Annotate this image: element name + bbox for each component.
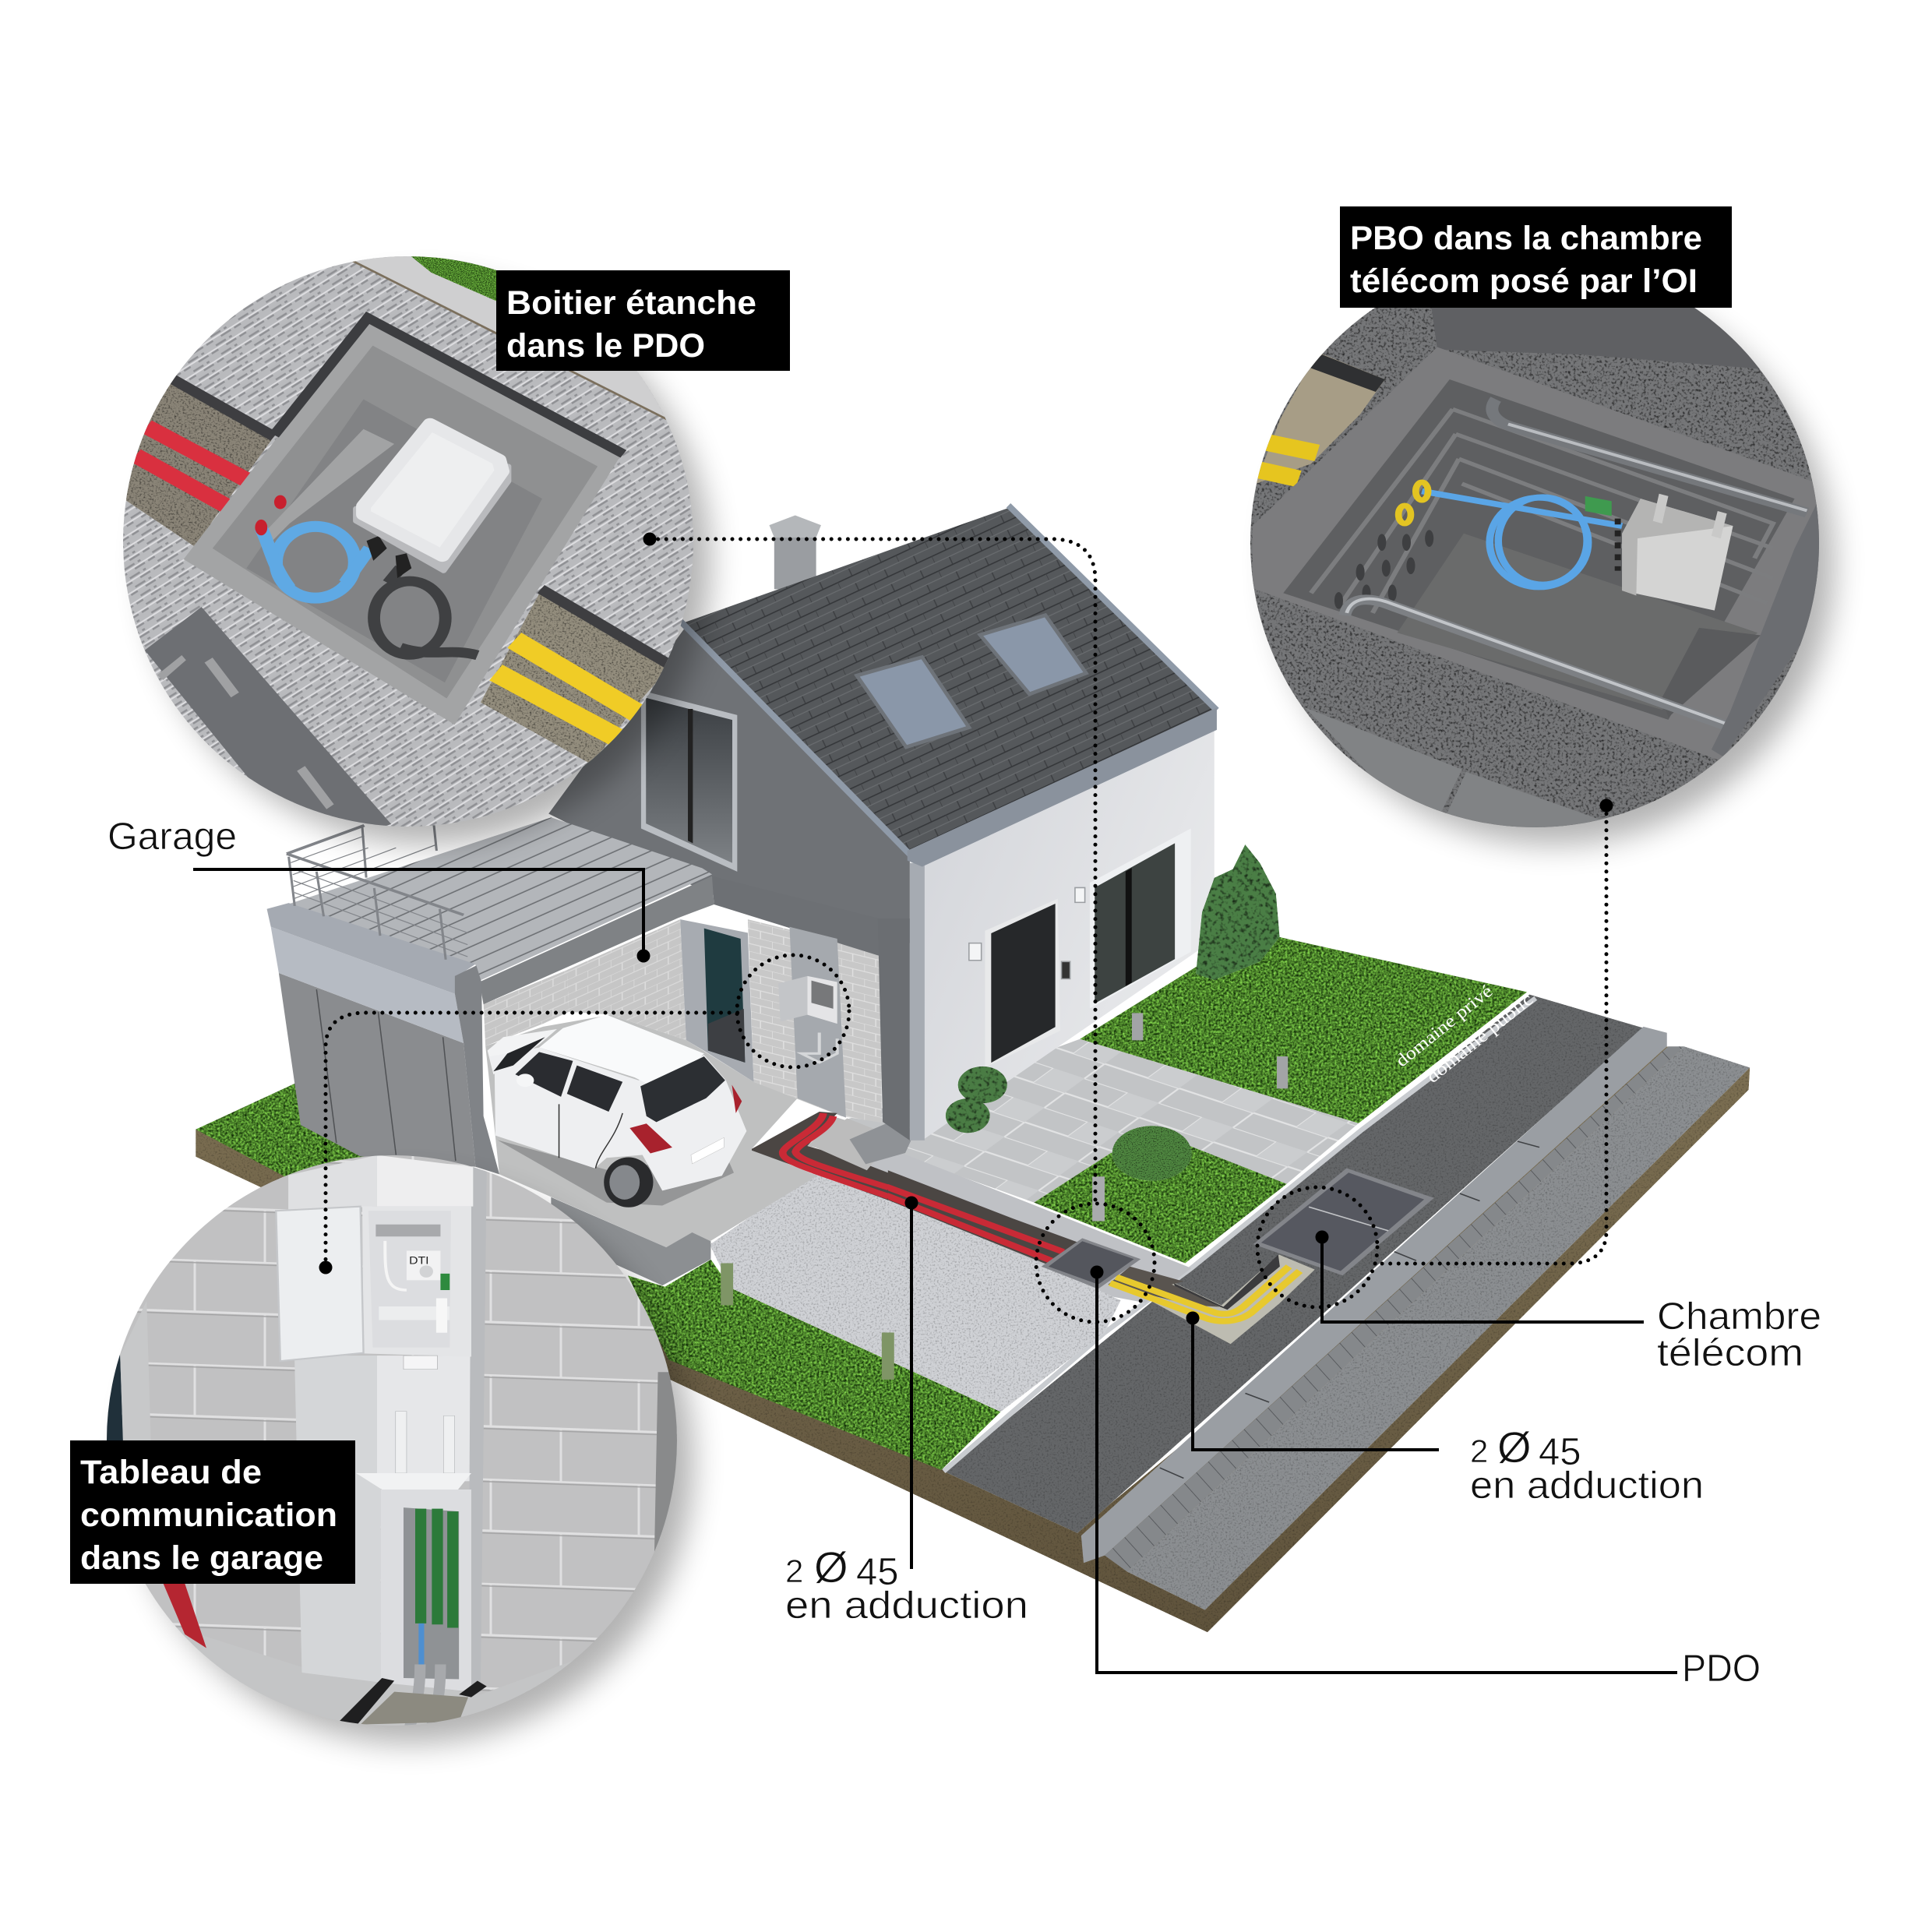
green tag (1585, 496, 1612, 516)
callout: 2 Ø 45 en adduction right: Ø (1497, 1423, 1532, 1472)
plate (691, 1137, 724, 1164)
trench fill (361, 1692, 468, 1725)
lawn front strip (628, 1260, 1000, 1470)
fascia ledge (267, 903, 475, 994)
soil slab edge (196, 1046, 1750, 1632)
label: Tableau de communication: communication (80, 1497, 337, 1534)
doorway (704, 929, 745, 1063)
pit floor (1398, 534, 1757, 710)
DTI module: DTI (409, 1254, 429, 1267)
fibre loops (385, 1241, 407, 1290)
callout: 2 Ø 45 en adduction left (785, 1197, 1028, 1627)
callout: Garage: Garage (108, 816, 237, 858)
light patch under pipes (1148, 1254, 1315, 1344)
carport beam (480, 876, 714, 1004)
dotted connector: PDO circle (650, 539, 1155, 1322)
floor (148, 1618, 616, 1754)
ledge (356, 1473, 471, 1493)
right column (878, 918, 910, 1141)
kerb joints (1160, 1141, 1539, 1479)
pit walls (213, 346, 598, 698)
door frame (680, 919, 754, 1082)
callout: 2 Ø 45 en adduction left: Ø (814, 1542, 848, 1592)
mirror (516, 1074, 534, 1087)
label: PBO dans la chambre: PBO dans la chambre (1350, 220, 1702, 257)
brick wall (101, 1153, 682, 1729)
concrete around step (811, 1118, 894, 1170)
lintel (712, 876, 888, 958)
green conduits (421, 1509, 453, 1628)
concrete edge along road (943, 998, 1535, 1472)
yellow pipe trench (481, 588, 672, 764)
circle shadows (129, 280, 1834, 1743)
column right strip (468, 1167, 487, 1694)
right lid strip (1712, 499, 1828, 757)
rear window (640, 1056, 725, 1122)
pit opening (1283, 379, 1795, 720)
callout: PDO: PDO (1682, 1648, 1761, 1690)
road (943, 995, 1644, 1533)
lower panel (381, 1490, 471, 1692)
sidewalk (1127, 1046, 1750, 1610)
callout: 2 Ø 45 en adduction right (1186, 1312, 1704, 1507)
label: Tableau de communication: Tableau de (80, 1454, 262, 1491)
house body (679, 506, 1536, 1141)
domaine labels (1392, 981, 1536, 1087)
pit frame (1253, 347, 1822, 762)
driveway (710, 1170, 1121, 1412)
stepped ledges (1311, 409, 1773, 613)
conduit opening (404, 1507, 459, 1679)
side windows (515, 1052, 622, 1112)
fascia band (271, 927, 464, 1043)
floor trench (339, 1678, 487, 1725)
callout: 2 Ø 45 en adduction right: en adduction (1470, 1465, 1704, 1507)
mini cabinet (807, 976, 837, 1024)
wall holes (1334, 530, 1433, 609)
cabinet interior (368, 1211, 451, 1348)
car (488, 1015, 746, 1208)
car body (489, 1048, 746, 1190)
column top (288, 1155, 473, 1211)
DTI module (407, 1250, 440, 1280)
cobble strip (1105, 1046, 1684, 1571)
anchor dots for dotted connectors (319, 533, 1613, 1274)
trees (1196, 844, 1280, 980)
label: Tableau de communication (70, 1440, 355, 1584)
gable window (641, 690, 737, 872)
back brick wall (567, 919, 686, 1040)
floor shadow band (1662, 628, 1761, 717)
brick facade (748, 919, 882, 1123)
wall lamps and intercom (969, 887, 1085, 979)
gutter (908, 707, 1217, 866)
red pipes (136, 427, 246, 506)
car hood (488, 1029, 557, 1074)
red pipe trench frame (752, 1112, 888, 1200)
label: Boitier étanche dans le PDO (496, 270, 790, 371)
grey ducts (410, 1665, 440, 1727)
telecom chamber lid (1253, 1169, 1434, 1275)
callout: PDO (1091, 1265, 1761, 1690)
callout: 2 Ø 45 en adduction right: 2 (1470, 1433, 1488, 1469)
panel seams (316, 989, 456, 1161)
car roof (539, 1015, 704, 1084)
column panel left (294, 1356, 381, 1683)
domaine labels: domaine privé (1392, 981, 1497, 1070)
far right grey strip (654, 1372, 681, 1574)
gravel (1246, 257, 1823, 834)
label: PBO dans la chambre (1340, 206, 1732, 308)
concrete strip by trench (842, 1140, 1191, 1303)
chimney (769, 515, 821, 589)
callout: 2 Ø 45 en adduction right: 45 (1539, 1431, 1581, 1473)
isometric scene: ground plot (196, 931, 1750, 1632)
roof trim (679, 506, 1217, 855)
paving (117, 249, 701, 834)
gable wall (548, 629, 910, 943)
domaine labels: domaine public (1423, 989, 1536, 1087)
bay window (1090, 828, 1191, 1008)
red grommets (255, 495, 287, 535)
pipe trench under PDO (1108, 1267, 1219, 1306)
ground details around telecom chamber (1042, 1126, 1539, 1479)
garage side panels (279, 973, 475, 1167)
bottom pavement (1305, 707, 1613, 851)
door lines (559, 1104, 622, 1169)
pit rim (184, 319, 621, 724)
yellow glands (1398, 482, 1428, 524)
windshield (493, 1037, 545, 1071)
label: PBO dans la chambre: télécom posé par l’OI (1350, 263, 1698, 300)
garage pillar (455, 965, 499, 1174)
lid plate (145, 607, 391, 851)
dotted connector: cabinet circle (326, 955, 849, 1267)
carport floor (485, 1015, 817, 1247)
yellow pipes (496, 640, 637, 737)
left brick wall (484, 970, 569, 1046)
PDO lid (1042, 1238, 1141, 1289)
potted plant (946, 1066, 1007, 1133)
car shadow (497, 1140, 734, 1206)
dotted connector: chamber circle (1257, 806, 1606, 1307)
skylight left (857, 657, 969, 747)
lawn back left (196, 1082, 372, 1176)
callout: Garage (108, 816, 650, 963)
blue cable (1422, 492, 1622, 587)
far left opening (104, 1301, 151, 1448)
pit floor (246, 400, 542, 682)
bracket slots (396, 1412, 455, 1473)
column panel centre (377, 1356, 471, 1482)
gable side of house (548, 629, 910, 943)
white sealed box (364, 424, 502, 555)
floor light patch (268, 428, 394, 540)
floor side face (551, 1197, 710, 1285)
downpipe (910, 863, 925, 1141)
soil band (1256, 352, 1385, 484)
circle: Boitier étanche dans le PDO (117, 245, 703, 851)
callout: 2 Ø 45 en adduction left: 45 (856, 1551, 899, 1593)
callout: Chambre télécom: télécom (1657, 1332, 1803, 1374)
cabinet frame (362, 1207, 471, 1357)
mini cabinet door (778, 976, 807, 1021)
circle: Tableau de communication (101, 1153, 682, 1754)
rail and breaker (379, 1274, 450, 1333)
red trench continuation (888, 1170, 1077, 1266)
circle: PBO dans la chambre télécom (1246, 257, 1828, 851)
small lawn (1034, 1145, 1287, 1263)
terrace deck (288, 817, 712, 981)
connectors (367, 536, 411, 578)
label: Boitier étanche dans le PDO: dans le PDO (506, 327, 705, 365)
yellow pipes (1250, 440, 1317, 479)
black coil (374, 568, 478, 655)
sockets (404, 1356, 437, 1370)
upper bar (1492, 400, 1807, 513)
road cut shadow (1174, 1254, 1280, 1310)
white facade (922, 730, 1215, 1141)
trench dark edges (171, 379, 670, 665)
blue tube (418, 1624, 425, 1665)
tile edge and grass (352, 256, 667, 421)
label: Tableau de communication: dans le garage (80, 1539, 323, 1577)
callout: 2 Ø 45 en adduction left: en adduction (785, 1585, 1028, 1627)
wheel (604, 1158, 653, 1208)
top lid (1431, 305, 1767, 369)
kerb (1081, 1027, 1667, 1563)
front door (985, 899, 1060, 1067)
red pipes (783, 1113, 889, 1197)
step block (850, 1123, 911, 1164)
red pipe trench (123, 377, 274, 548)
lower bar (1345, 599, 1737, 730)
open cabinet door (276, 1207, 364, 1361)
red pipes continuation (886, 1186, 1064, 1263)
car fragment (164, 1584, 206, 1648)
callout: 2 Ø 45 en adduction left: 2 (785, 1553, 803, 1589)
label: Boitier étanche dans le PDO: Boitier étanche (506, 284, 756, 322)
callout: Chambre télécom: Chambre (1657, 1296, 1821, 1338)
callout: Chambre télécom (1315, 1231, 1821, 1374)
patch panel (375, 1225, 440, 1236)
technical column (789, 927, 846, 1118)
box side (356, 467, 508, 571)
bush (1112, 1126, 1192, 1181)
garage and carport structure (267, 824, 889, 1285)
blue coil (261, 527, 369, 598)
roof (684, 508, 1215, 851)
mini bracket (802, 1033, 837, 1063)
lawn right (1080, 931, 1527, 1123)
patio tiles (842, 1039, 1359, 1203)
concrete behind step (807, 1118, 861, 1155)
skylight right (980, 615, 1086, 694)
PBO box (1618, 494, 1733, 611)
yellow pipes (1110, 1267, 1299, 1321)
railing (287, 824, 467, 960)
pit dark top edge (274, 318, 623, 454)
tail lights (629, 1085, 742, 1154)
bollards (721, 1013, 1288, 1380)
